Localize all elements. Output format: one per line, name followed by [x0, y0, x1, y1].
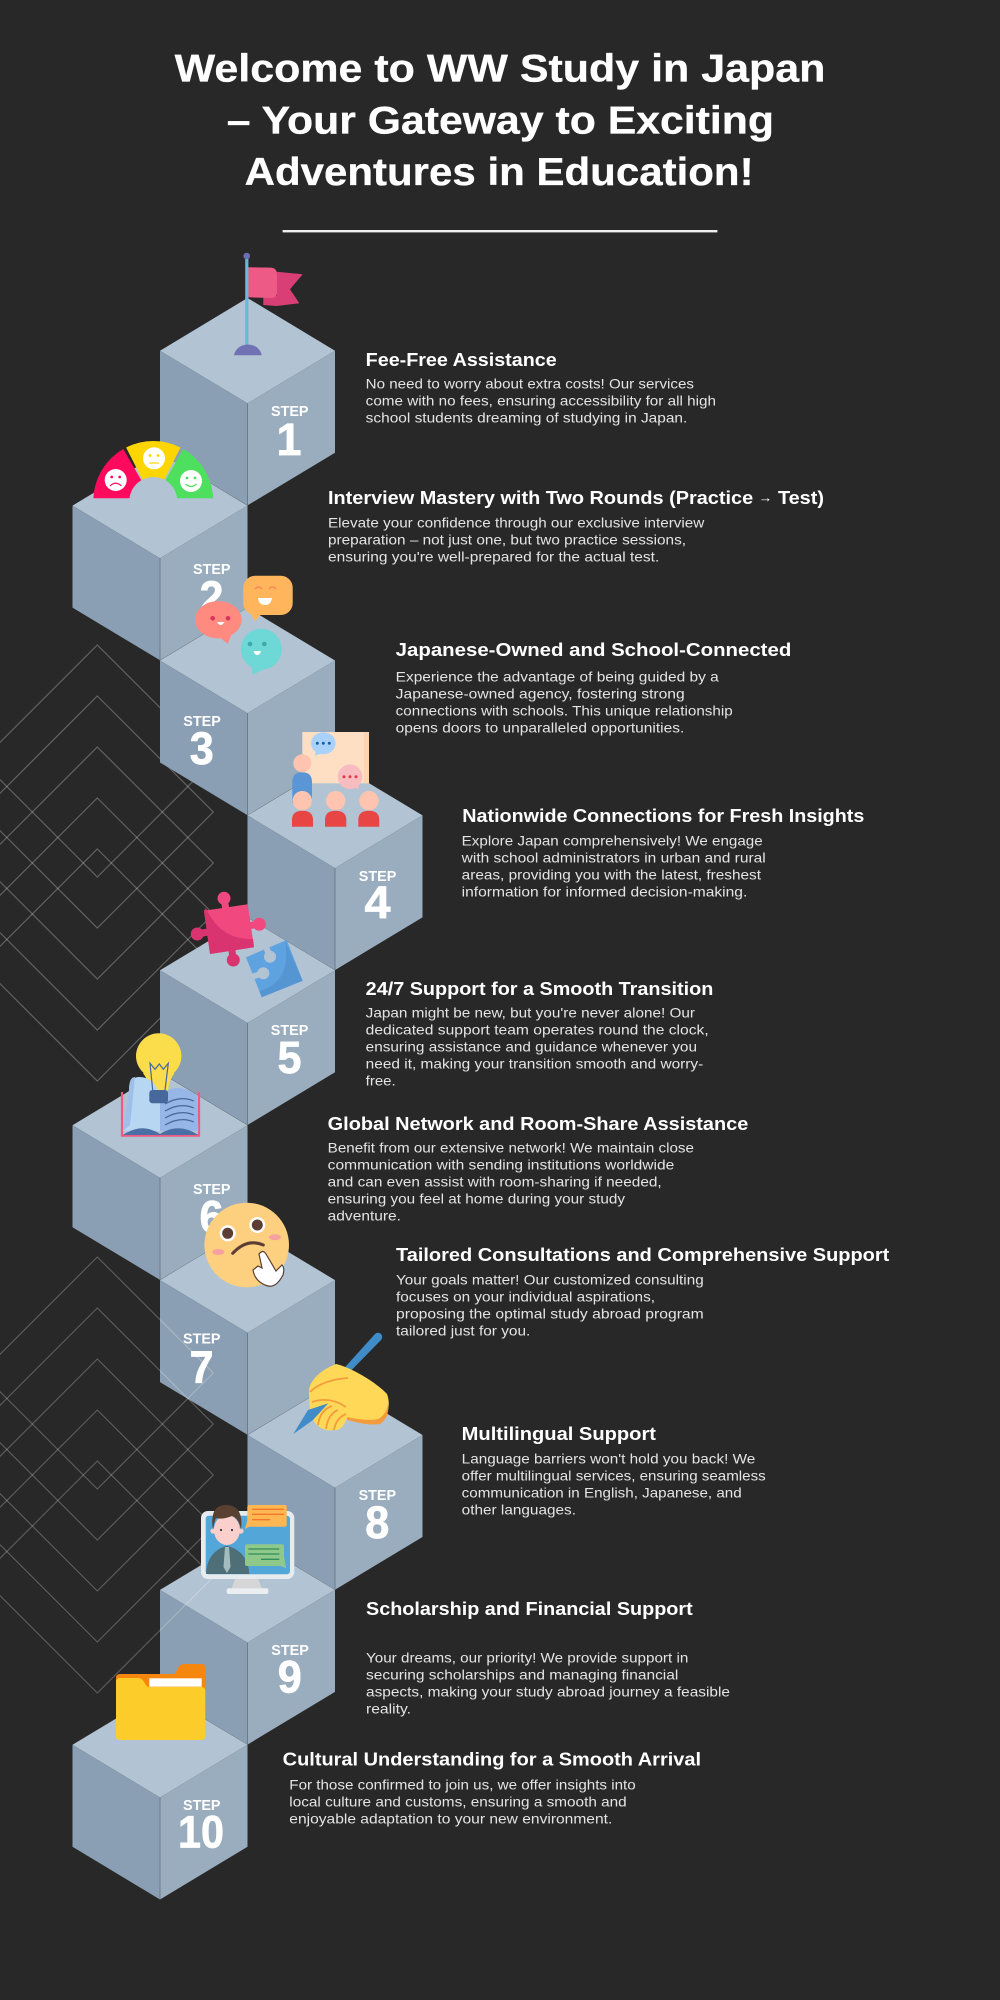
step label 9: STEP: [271, 1642, 309, 1659]
text: step 6: Benefit from our extensive network! We maintain close: [328, 1139, 694, 1155]
step label 7: [183, 1330, 220, 1393]
step label 1: [271, 403, 308, 465]
text: step 3: [396, 639, 791, 736]
cube: step 2: [72, 453, 248, 660]
cube: step 6: [72, 1072, 248, 1280]
text: step 9: securing scholarships and managing financial: [366, 1666, 678, 1682]
text: step 6: adventure.: [328, 1207, 401, 1223]
text: step 9: Your dreams, our priority! We provide support in: [366, 1649, 688, 1665]
text: step 1: school students dreaming of studying in Japan.: [366, 409, 687, 425]
text: step 8: [462, 1423, 766, 1517]
step label 4: STEP: [359, 868, 396, 885]
text: step 8: offer multilingual services, ensuring seamless: [462, 1467, 766, 1483]
text: step 9: reality.: [366, 1700, 411, 1716]
step label 9: [271, 1642, 309, 1703]
text: step 9: Scholarship and Financial Support: [366, 1598, 693, 1619]
step label 3: 3: [190, 723, 214, 774]
step label 1: 1: [276, 414, 302, 465]
step label 8: 8: [365, 1497, 389, 1548]
text: step 2: Elevate your confidence through our exclusive interview: [328, 514, 705, 530]
text: step 4: [461, 805, 864, 900]
text: step 8: Multilingual Support: [462, 1423, 657, 1444]
text: step 2: preparation – not just one, but two practice sessions,: [328, 531, 686, 547]
step label 10: 10: [178, 1806, 224, 1857]
text: step 6: communication with sending institutions worldwide: [328, 1156, 675, 1172]
step label 5: STEP: [271, 1022, 308, 1039]
icon: hand writing with pen: [293, 1333, 389, 1434]
text: step 4: Nationwide Connections for Fresh Insights: [462, 805, 864, 826]
text: step 5: need it, making your transition smooth and worry-: [366, 1055, 704, 1071]
step label 3: [183, 713, 221, 774]
step label 7: 7: [190, 1342, 214, 1393]
cube: step 9: [160, 1537, 335, 1745]
cube: step 8: [248, 1382, 422, 1590]
text: step 2: [328, 487, 824, 564]
cube: step 5: [160, 918, 335, 1125]
icon: satisfaction gauge: [93, 441, 213, 498]
text: step 8: communication in English, Japanese, and: [462, 1484, 742, 1500]
text: step 5: free.: [366, 1072, 396, 1088]
step label 3: STEP: [183, 713, 221, 730]
step label 5: 5: [278, 1032, 302, 1083]
icon: monitor with advisor: [201, 1505, 294, 1594]
text: step 5: Japan might be new, but you're never alone! Our: [366, 1004, 695, 1020]
icon: folder: [116, 1664, 205, 1740]
icon: flag: [234, 253, 303, 355]
title: Welcome to WW Study in Japan: [175, 48, 825, 91]
icon: classroom: [292, 732, 379, 827]
text: step 9: aspects, making your study abroad journey a feasible: [366, 1683, 730, 1699]
text: step 7: tailored just for you.: [396, 1323, 530, 1339]
text: step 1: come with no fees, ensuring accessibility for all high: [366, 392, 716, 408]
title: – Your Gateway to Exciting: [227, 99, 774, 142]
text: step 2: Test): [772, 487, 824, 508]
step label 2: 2: [200, 572, 224, 623]
icon: lightbulb and book: [122, 1033, 199, 1136]
step label 2: [193, 561, 230, 623]
text: step 6: [328, 1113, 748, 1223]
text: step 10: [283, 1749, 701, 1826]
text: step 1: [366, 349, 716, 425]
text: step 1: Fee-Free Assistance: [366, 349, 557, 370]
text: step 3: Japanese-owned agency, fostering strong: [396, 686, 685, 702]
title: Adventures in Education!: [245, 151, 754, 194]
text: step 7: Tailored Consultations and Comprehensive Support: [396, 1244, 890, 1265]
text: step 10: Cultural Understanding for a Smooth Arrival: [283, 1749, 701, 1770]
step label 2: STEP: [193, 561, 230, 578]
text: step 6: ensuring you feel at home during your study: [328, 1190, 625, 1206]
text: step 2: Interview Mastery with Two Rounds (Practice: [328, 487, 729, 508]
text: step 7: [396, 1244, 890, 1339]
step label 6: 6: [200, 1192, 224, 1243]
text: step 3: Experience the advantage of being guided by a: [396, 669, 719, 685]
text: step 2: ensuring you're well-prepared for the actual test.: [328, 548, 659, 564]
icon: speech bubbles: [195, 576, 293, 675]
cube: step 3: [160, 608, 335, 815]
step label 4: [359, 868, 396, 928]
text: step 4: with school administrators in urban and rural: [461, 850, 766, 866]
text: step 7: Your goals matter! Our customized consulting: [396, 1272, 704, 1288]
text: step 9: [366, 1598, 730, 1716]
text: step 4: areas, providing you with the latest, freshest: [462, 867, 761, 883]
step label 8: STEP: [359, 1487, 396, 1504]
text: step 10: For those confirmed to join us, we offer insights into: [289, 1776, 636, 1792]
text: step 4: information for informed decision-making.: [462, 884, 747, 900]
text: step 3: Japanese-Owned and School-Connected: [396, 639, 791, 660]
step label 1: STEP: [271, 403, 308, 420]
icon: puzzle pieces: [191, 892, 303, 997]
text: step 10: local culture and customs, ensuring a smooth and: [289, 1793, 627, 1809]
cube: step 1: [160, 298, 335, 505]
text: step 3: connections with schools. This unique relationship: [396, 703, 733, 719]
cube: step 7: [160, 1227, 335, 1435]
step label 5: [271, 1022, 308, 1083]
step label 7: STEP: [183, 1330, 220, 1347]
text: step 4: Explore Japan comprehensively! We engage: [462, 833, 763, 849]
text: step 6: Global Network and Room-Share Assistance: [328, 1113, 748, 1134]
text: step 7: proposing the optimal study abroad program: [396, 1306, 704, 1322]
text: step 6: and can even assist with room-sharing if needed,: [328, 1173, 662, 1189]
text: step 5: [366, 978, 713, 1088]
cube: step 10: [72, 1692, 248, 1900]
text: step 10: enjoyable adaptation to your new environment.: [289, 1810, 612, 1826]
step label 9: 9: [278, 1652, 302, 1703]
cube: step 4: [248, 763, 422, 970]
text: step 8: Language barriers won't hold you back! We: [462, 1450, 756, 1466]
icon: thinking emoji: [204, 1203, 289, 1287]
text: step 2: →: [759, 490, 772, 505]
text: step 5: 24/7 Support for a Smooth Transition: [366, 978, 713, 999]
step label 6: STEP: [193, 1181, 230, 1198]
step label 8: [359, 1487, 396, 1548]
text: step 1: No need to worry about extra costs! Our services: [366, 375, 694, 391]
text: step 5: dedicated support team operates round the clock,: [366, 1021, 709, 1037]
text: step 8: other languages.: [462, 1501, 576, 1517]
step label 4: 4: [364, 877, 390, 928]
text: step 7: focuses on your individual aspirations,: [396, 1289, 655, 1305]
step label 10: STEP: [183, 1797, 220, 1814]
title: [175, 48, 825, 194]
text: step 5: ensuring assistance and guidance whenever you: [366, 1038, 697, 1054]
step label 6: [193, 1181, 230, 1243]
text: step 3: opens doors to unparalleled opportunities.: [396, 720, 684, 736]
